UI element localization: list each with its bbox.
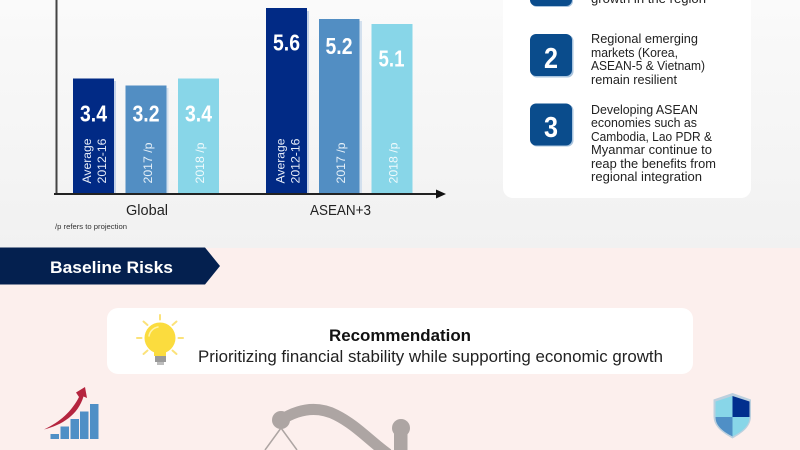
- heading ribbon: Baseline Risks: [0, 248, 220, 284]
- bar: ASEAN+3 average 2012-16: [266, 8, 309, 193]
- panel: key growth points: [503, 0, 751, 198]
- recommendation text: Prioritizing financial stability while supporting economic growth: [198, 348, 663, 366]
- icon: shield: [714, 393, 751, 438]
- point 1: [530, 0, 706, 7]
- bar: Global 2018/p: 3.4: [185, 100, 212, 126]
- point 2: [530, 32, 705, 87]
- bar: ASEAN+3 2018/p: 2018 /p: [386, 142, 400, 184]
- bar: Global 2018/p: [178, 78, 219, 193]
- panel: recommendation: [107, 308, 693, 374]
- footnote: /p refers to projection: [55, 222, 127, 231]
- point 2: remain resilient: [591, 73, 678, 87]
- bar: ASEAN+3 average 2012-16: Average: [274, 138, 288, 184]
- point 3: economies such as: [591, 116, 697, 130]
- icon: light bulb: [137, 315, 183, 365]
- bar chart: GDP growth: [54, 0, 446, 231]
- point 3: Myanmar continue to: [591, 143, 712, 157]
- bar: Global average 2012-16: 3.4: [80, 100, 107, 126]
- bar: Global average 2012-16: [73, 78, 116, 193]
- point 2: markets (Korea,: [591, 46, 678, 60]
- bar: ASEAN+3 2017/p: [319, 19, 362, 193]
- recommendation title: Recommendation: [329, 327, 471, 345]
- bar: ASEAN+3 2018/p: 5.1: [378, 46, 405, 72]
- icon: growth bars with arrow: [44, 387, 98, 439]
- point 3: reap the benefits from: [591, 157, 716, 171]
- point 2: ASEAN-5 & Vietnam): [591, 59, 705, 73]
- point 3: Cambodia, Lao PDR &: [591, 130, 713, 144]
- icon: balance scale: [265, 409, 410, 450]
- category label: Global: Global: [126, 202, 168, 219]
- bar: Global 2018/p: 2018 /p: [193, 142, 207, 184]
- point 2: Regional emerging: [591, 32, 698, 46]
- bar: Global average 2012-16: 2012-16: [95, 138, 109, 184]
- bar: ASEAN+3 average 2012-16: 5.6: [273, 30, 300, 56]
- bar: ASEAN+3 2017/p: 2017 /p: [334, 142, 348, 184]
- bar: ASEAN+3 2018/p: [372, 24, 412, 193]
- bar: Global 2017/p: 2017 /p: [141, 142, 155, 184]
- bar: Global 2017/p: [126, 86, 168, 193]
- point 2: 2: [544, 43, 558, 75]
- bar: Global average 2012-16: Average: [80, 138, 94, 184]
- point 3: regional integration: [591, 170, 702, 184]
- point 3: [530, 103, 716, 184]
- bar: ASEAN+3 2017/p: 5.2: [326, 33, 352, 59]
- point 3: 3: [544, 112, 558, 144]
- point 3: Developing ASEAN: [591, 103, 698, 117]
- bar: Global 2017/p: 3.2: [132, 100, 160, 126]
- bar: ASEAN+3 average 2012-16: 2012-16: [288, 138, 302, 184]
- chart axes: [54, 0, 446, 198]
- category label: ASEAN+3: ASEAN+3: [310, 202, 371, 219]
- heading ribbon: Baseline Risks: Baseline Risks: [50, 258, 173, 277]
